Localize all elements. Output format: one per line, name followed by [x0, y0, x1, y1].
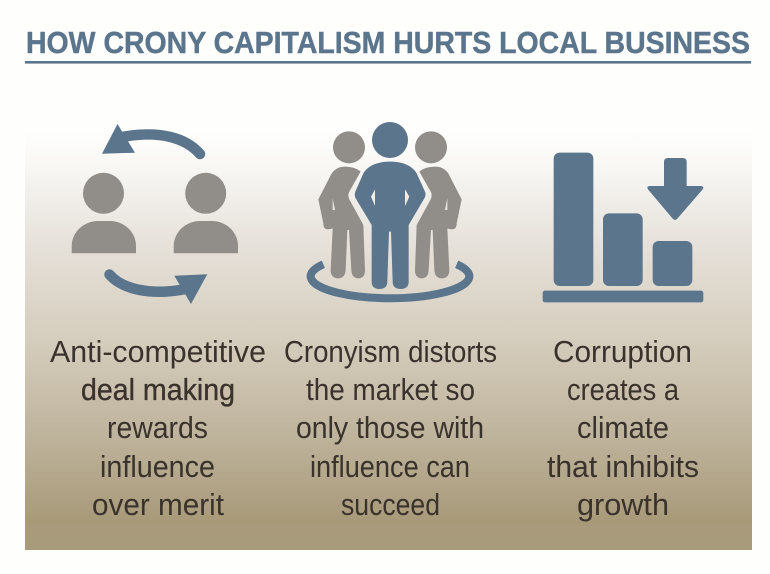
text block: anti-competitive deal making: over merit: [92, 487, 224, 522]
text block: corruption inhibits growth: creates a: [567, 372, 680, 407]
left person: [72, 173, 136, 253]
gradient background panel: [25, 130, 752, 550]
top curved arrow: [102, 124, 200, 154]
text block: corruption inhibits growth: climate: [577, 410, 669, 445]
text block: corruption inhibits growth: [547, 334, 699, 522]
text block: anti-competitive deal making: Anti-competitive: [50, 334, 266, 369]
text block: corruption inhibits growth: that inhibits: [547, 449, 699, 484]
text block: cronyism distorts the market: influence can: [310, 449, 470, 484]
ring: [311, 264, 469, 298]
icon: declining bar chart with down arrow: [543, 153, 703, 302]
icon: group of three people in a ring: [311, 122, 469, 298]
baseline: [543, 291, 703, 302]
text block: cronyism distorts the market: Cronyism distorts: [284, 334, 497, 369]
title underline: [25, 61, 751, 64]
text block: cronyism distorts the market: only those with: [296, 410, 484, 445]
text block: corruption inhibits growth: growth: [577, 487, 669, 522]
text block: anti-competitive deal making: influence: [100, 449, 215, 484]
text block: anti-competitive deal making: [50, 334, 266, 522]
text block: cronyism distorts the market: succeed: [341, 487, 440, 522]
right person: [174, 173, 238, 253]
icon: two people exchanging: [72, 124, 238, 304]
tall bar: [554, 153, 593, 286]
text block: corruption inhibits growth: Corruption: [553, 334, 692, 369]
text block: anti-competitive deal making: rewards: [107, 410, 208, 445]
right grey figure: [415, 131, 462, 278]
text block: cronyism distorts the market: [284, 334, 497, 522]
middle bar: [603, 213, 643, 286]
text block: anti-competitive deal making: deal making: [81, 372, 235, 407]
bottom curved arrow: [110, 274, 207, 304]
text block: cronyism distorts the market: the market so: [306, 372, 475, 407]
centre blue figure: [355, 122, 426, 289]
down arrow: [647, 158, 703, 220]
left grey figure: [318, 131, 365, 278]
short bar: [653, 241, 692, 286]
